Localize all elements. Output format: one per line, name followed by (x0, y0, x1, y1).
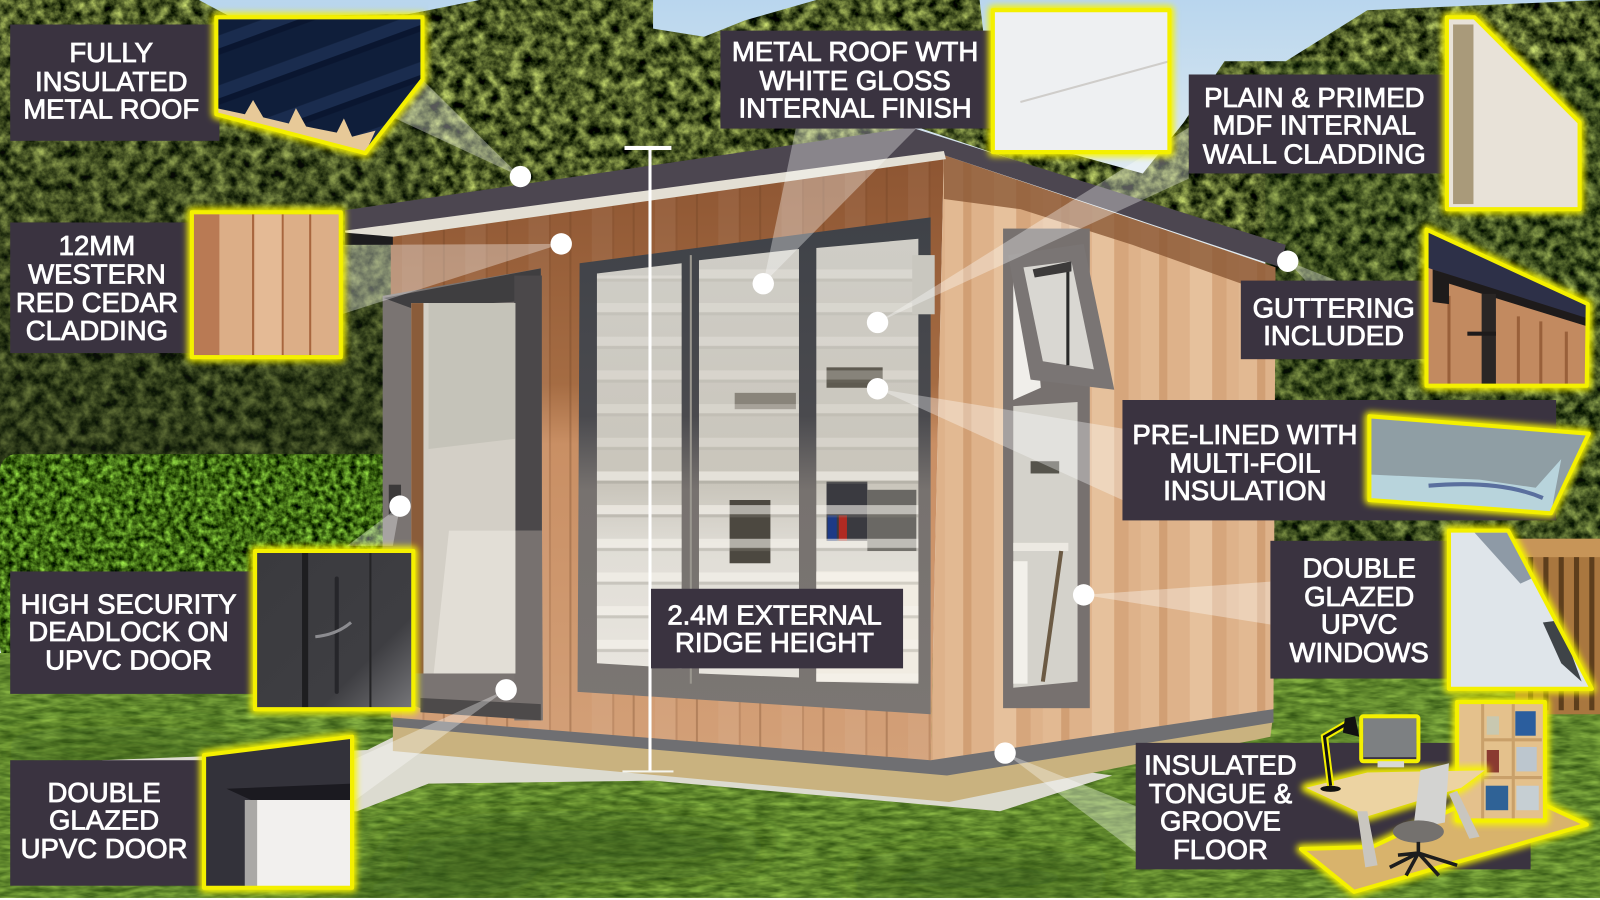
panel: insulated tongue and groove floor (1136, 702, 1587, 892)
label text: white gloss: INTERNAL FINISH (739, 92, 972, 123)
label text: MDF (1203, 82, 1426, 169)
label text: floor (1144, 749, 1297, 865)
label text: ridge height (667, 599, 882, 658)
skirting (393, 707, 1273, 776)
panel: fully insulated metal roof (10, 10, 429, 163)
door (383, 268, 543, 720)
label text: ridge height: 2.4M EXTERNAL (667, 599, 882, 630)
label text: deadlock: UPVC DOOR (45, 644, 212, 675)
inset image: office furniture on floor (1301, 702, 1587, 892)
side window (1003, 229, 1114, 708)
label text: windows: DOUBLE (1303, 553, 1416, 584)
label text: windows (1290, 553, 1429, 668)
label text: white gloss: METAL ROOF WTH (732, 36, 978, 67)
label text: windows: GLAZED (1304, 581, 1414, 612)
panel: metal roof with white gloss finish (720, 10, 1169, 152)
panel: high security deadlock (10, 551, 413, 709)
label text: door: GLAZED (49, 805, 159, 836)
inset image: cedar boards (192, 212, 341, 357)
lawn shadows (0, 736, 1112, 900)
inset image: window section (1447, 529, 1595, 692)
label text: roof: METAL ROOF (23, 93, 199, 124)
panel: western red cedar cladding (10, 212, 341, 357)
label text: door: DOUBLE (47, 777, 161, 808)
label text: guttering (1253, 292, 1415, 351)
panel: 2.4m external ridge height (651, 589, 903, 668)
desk lamp (1320, 716, 1359, 792)
panel: guttering included (1241, 230, 1590, 388)
label text: white gloss (732, 36, 978, 123)
paving (102, 730, 1112, 816)
front wall (391, 153, 944, 760)
label text: deadlock: HIGH SECURITY (21, 588, 236, 619)
panel: multi-foil insulation (1122, 400, 1592, 520)
eave shadow on side wall (944, 155, 1276, 296)
office chair (1390, 763, 1457, 876)
label text: guttering: GUTTERING (1253, 292, 1415, 323)
inset image: white gloss sheet (993, 10, 1169, 152)
label text: ridge height: RIDGE HEIGHT (675, 627, 874, 658)
label text: roof: INSULATED (35, 66, 188, 97)
label text: roof: FULLY (69, 37, 153, 68)
inset image: roof panel (209, 10, 429, 163)
inset image: MDF board (1447, 17, 1585, 211)
roof (345, 128, 1286, 267)
label text: floor: INSULATED (1144, 749, 1297, 780)
inset image: foil roll (1367, 413, 1592, 515)
panel: double glazed uPVC windows (1270, 529, 1595, 692)
inset image: door handle (255, 551, 413, 709)
label text: foil: INSULATION (1163, 475, 1327, 506)
label text: MDF: MDF INTERNAL (1213, 110, 1416, 141)
bookcase (1457, 702, 1545, 820)
label text: cedar (16, 230, 178, 346)
label text: deadlock: DEADLOCK ON (28, 616, 229, 647)
desk (1306, 770, 1485, 867)
side wall (931, 155, 1276, 760)
label text: cedar: CLADDING (26, 315, 168, 346)
label text: white gloss: WHITE GLOSS (759, 65, 951, 96)
timber base (393, 712, 1273, 802)
panel: MDF internal wall cladding (1189, 17, 1585, 211)
fence (1515, 539, 1600, 714)
label text: windows: WINDOWS (1290, 637, 1429, 668)
label text: MDF: PLAIN & PRIMED (1204, 82, 1425, 113)
monitor (1361, 716, 1418, 767)
label text: cedar: RED CEDAR (16, 287, 178, 318)
label text: floor: TONGUE & (1149, 778, 1292, 809)
label text: cedar: WESTERN (28, 259, 166, 290)
label text: door (21, 777, 187, 864)
ridge height measure line (622, 146, 673, 772)
inset image: gutter and cedar wall (1427, 230, 1590, 388)
label text: floor: GROOVE (1160, 806, 1281, 837)
garden room building (102, 128, 1286, 816)
label text: MDF: WALL CLADDING (1203, 138, 1426, 169)
label text: cedar: 12MM (59, 230, 135, 261)
panel: double glazed uPVC door (10, 735, 355, 890)
wall light (912, 255, 935, 314)
marker dots (389, 166, 1298, 764)
label text: foil (1132, 419, 1357, 506)
label text: windows: UPVC (1321, 609, 1397, 640)
label text: deadlock (21, 588, 236, 675)
light cones from markers to callouts (342, 80, 1337, 852)
label text: foil: PRE-LINED WITH (1132, 419, 1357, 450)
main window (578, 217, 931, 714)
label text: guttering: INCLUDED (1263, 320, 1404, 351)
label text: door: UPVC DOOR (21, 833, 187, 864)
label text: roof (23, 37, 199, 124)
inset image: door corner (202, 735, 355, 890)
label text: foil: MULTI-FOIL (1169, 447, 1320, 478)
label text: floor: FLOOR (1173, 834, 1268, 865)
